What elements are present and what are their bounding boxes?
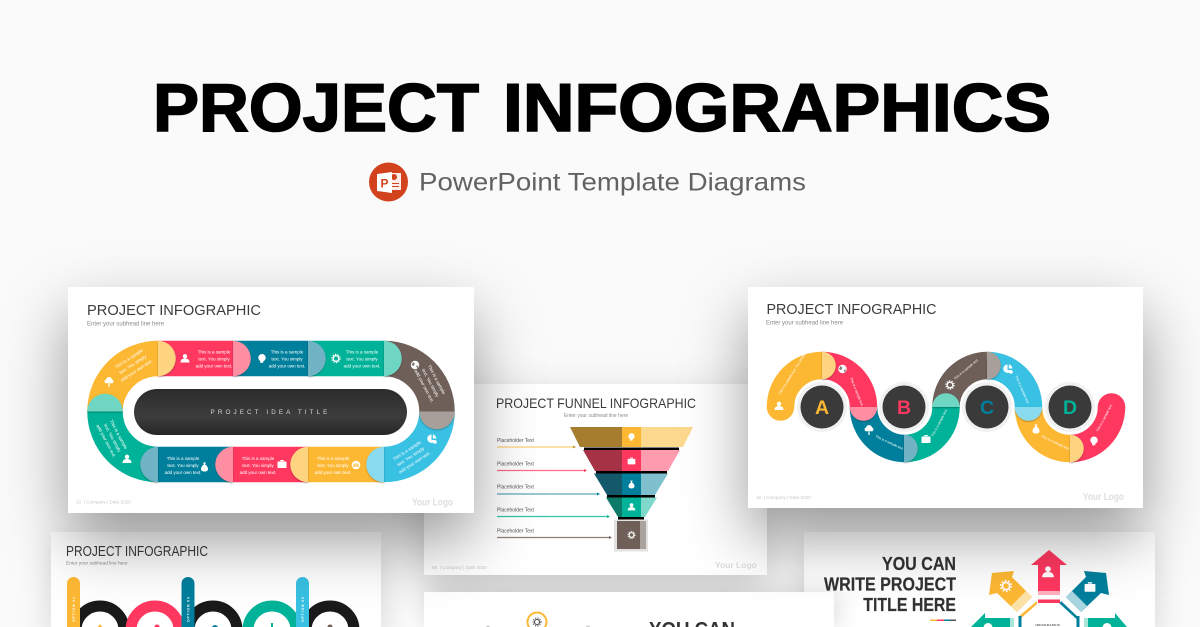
- segment captions: This is a sample: [271, 350, 304, 354]
- icon: gear ring: [528, 612, 546, 627]
- funnel labels and arrows: [497, 438, 612, 539]
- funnel band 3: [594, 474, 668, 498]
- circle B: B: [897, 397, 911, 419]
- icon: PowerPoint logo: P: [380, 176, 389, 190]
- funnel labels and arrows: Placeholder Text: [497, 528, 534, 534]
- rainbow rule: [930, 620, 956, 621]
- segment captions: This is a sample: [427, 364, 447, 395]
- arrow: up red: [1031, 550, 1067, 603]
- snake segments: [780, 366, 1112, 448]
- segment captions: text. You simply: [346, 356, 378, 362]
- option pill 05: OPTION 05: [301, 596, 305, 622]
- segment captions: text. You simply: [396, 446, 426, 467]
- node dots: [486, 626, 590, 627]
- segment captions: This is a sample: [392, 439, 422, 462]
- logo: funnel: Your Logo: [715, 560, 757, 570]
- funnel band 1: [570, 427, 693, 450]
- heading: funnel: PROJECT FUNNEL INFOGRAPHIC: [496, 395, 696, 411]
- panel: funnel slide: [424, 384, 767, 575]
- segment captions: text. You simply: [242, 463, 274, 468]
- center title pill: [134, 389, 407, 435]
- segment captions: add your own text.: [269, 364, 305, 368]
- segment captions: text. You simply: [167, 463, 199, 468]
- segment captions: This is a sample: [114, 347, 144, 370]
- circle D: D: [1063, 397, 1077, 419]
- logo: snake: Your Logo: [1083, 491, 1124, 503]
- option pill 03: OPTION 03: [186, 596, 190, 622]
- segment captions: This is a sample: [167, 456, 200, 461]
- snake captions: [777, 353, 1113, 451]
- segment captions: add your own text.: [398, 450, 431, 475]
- funnel labels and arrows: Placeholder Text: [497, 462, 534, 468]
- icons in rings: [97, 623, 332, 627]
- footer: snake: 18 | Company | Date 2020: [756, 495, 811, 500]
- segment captions: This is a sample: [317, 456, 350, 461]
- subhead: funnel: Enter your subhead line here: [564, 413, 628, 419]
- circle C: [962, 382, 1012, 432]
- arrow: up-left orange: [989, 571, 1037, 619]
- segment captions: add your own text.: [413, 369, 435, 403]
- footer: funnel: 88 | Company | Date 2020: [432, 565, 487, 570]
- circle B: [879, 382, 929, 432]
- racetrack segments: [105, 358, 437, 464]
- snake captions: This is a sample text.: [1041, 434, 1070, 451]
- snake captions: This is a sample text.: [1095, 403, 1113, 432]
- snake end caps: [767, 393, 1125, 421]
- logo: racetrack: Your Logo: [412, 496, 453, 508]
- segment captions: text. You simply: [271, 356, 303, 362]
- snake captions: This is a sample text.: [1014, 375, 1030, 405]
- snake captions: This is a sample text. You simply: [777, 353, 806, 396]
- icon: PowerPoint logo: [369, 162, 408, 202]
- segment captions: text. You simply: [103, 423, 122, 453]
- snake joints: [822, 352, 1084, 462]
- headline: WRITE PROJECT: [824, 574, 956, 595]
- segment captions: text. You simply: [317, 463, 349, 468]
- panel: lower right slide with arrows: [804, 532, 1155, 627]
- title: [153, 70, 1051, 140]
- heading: racetrack: PROJECT INFOGRAPHIC: [87, 302, 261, 319]
- funnel band 4: [606, 498, 657, 520]
- segment captions: This is a sample: [198, 350, 231, 354]
- segment captions: text. You simply: [118, 354, 148, 375]
- panel: snake slide: [748, 287, 1143, 508]
- snake captions: This is a sample text.: [930, 408, 948, 437]
- headline: YOU CAN: [882, 553, 956, 574]
- option pill 01: OPTION 01: [72, 596, 76, 622]
- segment captions: add your own text.: [315, 470, 351, 475]
- snake captions: This is a sample text.: [849, 377, 864, 407]
- segment captions: add your own text.: [344, 364, 380, 368]
- segment captions: text. You simply: [198, 356, 230, 362]
- snake captions: This is a sample text.: [875, 434, 904, 451]
- ring chain: [76, 606, 354, 627]
- segment captions: [95, 347, 447, 475]
- circle A: [797, 382, 847, 432]
- segment captions: This is a sample: [346, 350, 379, 354]
- funnel stem: [614, 520, 648, 552]
- headline: [824, 553, 956, 615]
- subhead: lower left slide: Enter your subhead line here: [66, 560, 128, 566]
- option pill 03: [182, 577, 194, 627]
- arrow: up-right teal: [1060, 571, 1109, 619]
- segment icons: [105, 354, 437, 472]
- segment captions: add your own text.: [240, 470, 276, 475]
- segment captions: add your own text.: [196, 364, 232, 368]
- racetrack joints: [87, 341, 455, 482]
- footer: racetrack: 22 | Company | Date 2020: [76, 500, 131, 504]
- snake icons: [774, 364, 1098, 445]
- circle A: A: [815, 397, 829, 419]
- segment captions: This is a sample: [242, 456, 275, 461]
- snake captions: This is a sample text.: [953, 358, 979, 381]
- heading: lower left slide: PROJECT INFOGRAPHIC: [66, 543, 208, 560]
- panel: lower left slide with rings: [51, 532, 381, 627]
- circle D: [1045, 382, 1095, 432]
- circle C: C: [980, 397, 994, 419]
- panel: bottom center slide: [424, 592, 834, 627]
- heading: snake: PROJECT INFOGRAPHIC: [766, 301, 937, 318]
- center title pill: PROJECT IDEA TITLE: [211, 409, 330, 416]
- subhead: racetrack: Enter your subhead line here: [87, 322, 165, 328]
- segment captions: text. You simply: [421, 368, 440, 398]
- headline: TITLE HERE: [863, 594, 956, 615]
- subhead: snake: Enter your subhead line here: [766, 320, 844, 326]
- segment captions: add your own text.: [95, 424, 117, 458]
- center label: INFOGRAPHIC: [1035, 623, 1061, 627]
- funnel labels and arrows: Placeholder Text: [497, 508, 534, 514]
- segment captions: add your own text.: [120, 358, 153, 383]
- panel: racetrack slide: [68, 287, 474, 513]
- option pill 01: [67, 577, 80, 627]
- option pill 05: [296, 577, 309, 627]
- subtitle: PowerPoint Template Diagrams: [419, 168, 806, 196]
- arrow: lower right green: [1076, 613, 1127, 627]
- segment captions: add your own text.: [165, 470, 201, 475]
- segment captions: This is a sample: [109, 419, 129, 450]
- funnel labels and arrows: Placeholder Text: [497, 484, 534, 490]
- arrow: lower left green: [971, 613, 1022, 627]
- funnel band 2: [583, 450, 680, 474]
- funnel labels and arrows: Placeholder Text: [497, 438, 534, 444]
